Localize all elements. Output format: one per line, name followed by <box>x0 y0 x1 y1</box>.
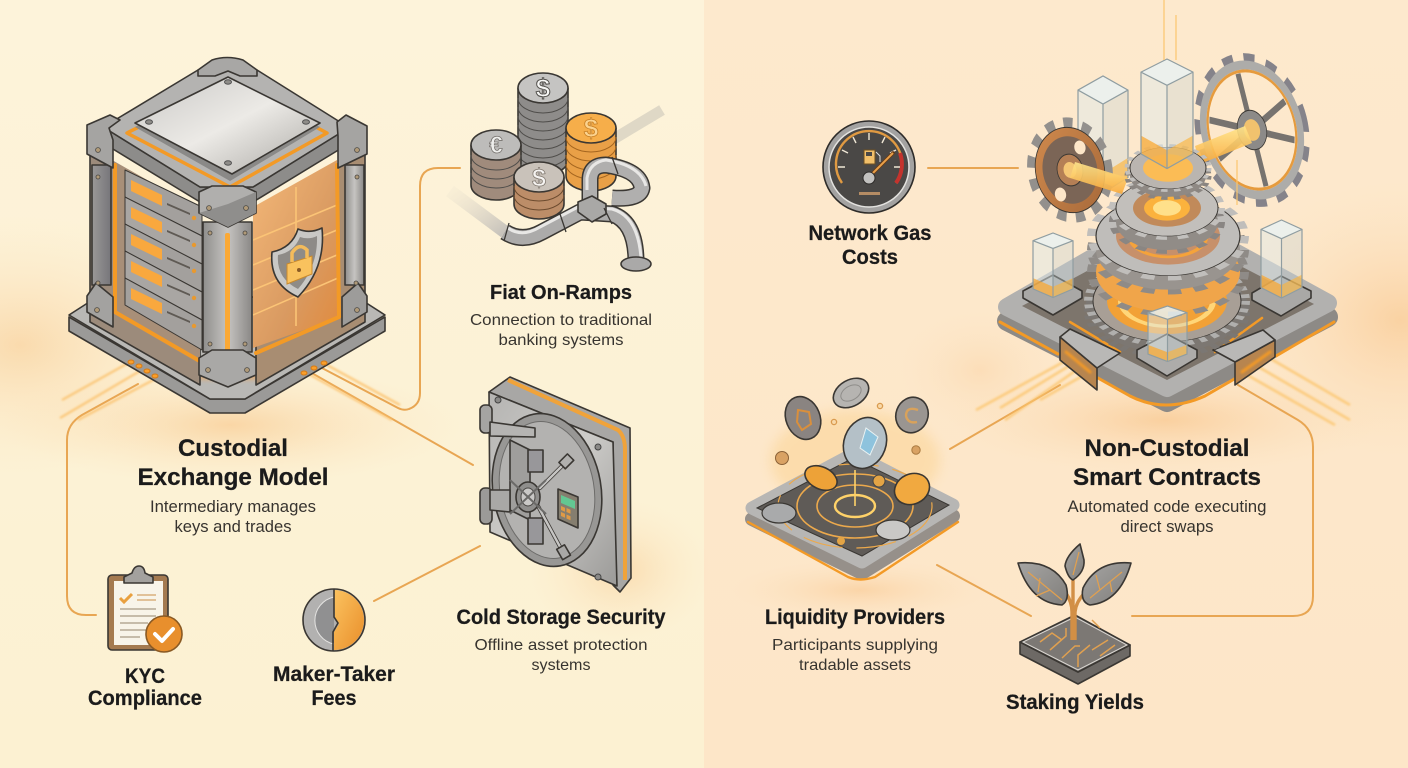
right gear <box>1184 48 1320 212</box>
connector: contract to staking <box>1132 385 1313 616</box>
light trails <box>60 362 400 420</box>
text: custodial description <box>150 498 316 536</box>
text: cold storage description: systems <box>532 657 590 674</box>
title: Custodial Exchange Model: Custodial <box>178 435 288 462</box>
far pipe segment <box>612 110 662 140</box>
shield with padlock <box>272 228 322 297</box>
light column <box>1164 0 1237 205</box>
left beam <box>1070 162 1128 194</box>
tall silver stack <box>518 73 568 175</box>
background: right panel <box>704 0 1408 768</box>
stem <box>1048 577 1108 640</box>
corner brackets and posts <box>87 58 367 387</box>
connector: pool to staking <box>937 565 1031 616</box>
chip <box>1020 642 1130 684</box>
icon: network gas gauge <box>823 121 915 213</box>
icon: maker-taker coin <box>303 589 365 651</box>
label: KYC Compliance: KYC <box>125 665 165 688</box>
right pedestal crystal <box>1252 220 1311 316</box>
text: non-custodial description: Automated code executing <box>1068 498 1266 516</box>
label: Maker-Taker Fees <box>273 663 395 710</box>
vault door disc <box>480 405 614 575</box>
text: custodial description: keys and trades <box>174 518 292 536</box>
title: Non-Custodial Smart Contracts: Smart Contracts <box>1073 464 1261 491</box>
connector: contract to liquidity pool <box>950 385 1060 449</box>
bottom gear <box>1091 270 1243 354</box>
background glows <box>0 180 1408 640</box>
label: Maker-Taker Fees: Maker-Taker <box>273 663 395 686</box>
icon: KYC clipboard <box>108 566 182 652</box>
connector: exchange to KYC <box>67 384 138 615</box>
euro stack <box>471 130 521 200</box>
locking bars <box>538 460 568 556</box>
platform <box>1007 229 1328 402</box>
connector: gas to smart contract <box>928 167 1018 169</box>
hinges <box>510 440 530 520</box>
text: fiat description: Connection to traditional <box>470 312 652 329</box>
icon: liquidity pool <box>748 372 958 580</box>
gold stack <box>566 113 616 191</box>
leaves <box>1018 563 1067 605</box>
icon: coins and pipeline <box>450 73 662 271</box>
left gear <box>1023 116 1117 224</box>
keypad <box>558 489 578 528</box>
icon: custodial exchange server cube <box>60 58 400 420</box>
title: Non-Custodial Smart Contracts <box>1073 435 1261 491</box>
base port lights <box>128 360 327 378</box>
top gear <box>1130 155 1206 197</box>
coins <box>762 372 935 545</box>
wheel <box>516 482 540 512</box>
connector: exchange to fiat on-ramps <box>322 168 460 410</box>
text: liquidity description <box>772 637 938 674</box>
brushed top plate <box>135 82 320 181</box>
pipes <box>450 160 646 262</box>
text: non-custodial description: direct swaps <box>1120 518 1214 536</box>
text: fiat description: banking systems <box>498 332 624 349</box>
upper gear <box>1116 194 1218 250</box>
front dollar stack: $ <box>532 164 546 192</box>
base plate <box>69 317 385 413</box>
icon: non-custodial smart contract gears <box>976 0 1350 425</box>
label: Staking Yields: Staking Yields <box>1006 691 1144 714</box>
label: KYC Compliance <box>88 665 202 710</box>
connector: maker-taker to vault <box>374 546 480 601</box>
pool tray <box>752 465 953 573</box>
connector: exchange to cold storage <box>310 372 473 465</box>
fuel pump glyph <box>864 150 880 164</box>
server units <box>125 170 202 350</box>
text: fiat description <box>470 312 652 349</box>
pool swirl rings <box>778 464 932 548</box>
icon: vault door <box>480 377 631 592</box>
label: KYC Compliance: Compliance <box>88 687 202 710</box>
light trails <box>976 356 1350 425</box>
middle large gear <box>1096 232 1240 312</box>
label: Network Gas Costs: Network Gas <box>808 222 932 245</box>
back crystal <box>1078 76 1128 193</box>
upper elbow <box>590 165 642 200</box>
label: Fiat On-Ramps: Fiat On-Ramps <box>490 282 632 304</box>
icon: staking plant on chip <box>1018 544 1131 684</box>
top frame <box>108 130 345 202</box>
centre crystal <box>1141 59 1193 168</box>
right face glass <box>256 150 365 385</box>
label: Liquidity Providers: Liquidity Providers <box>765 606 945 629</box>
text: custodial description: Intermediary manages <box>150 498 316 516</box>
title: Non-Custodial Smart Contracts: Non-Custodial <box>1084 435 1250 462</box>
label: Cold Storage Security: Cold Storage Security <box>456 606 666 629</box>
title: Custodial Exchange Model <box>138 435 328 491</box>
text: cold storage description <box>474 637 648 674</box>
text: liquidity description: Participants supplying <box>772 637 938 654</box>
text: non-custodial description <box>1068 498 1266 536</box>
lower pipe run <box>505 212 636 262</box>
title: Custodial Exchange Model: Exchange Model <box>138 464 328 491</box>
gold stack: $ <box>584 113 599 143</box>
label: Maker-Taker Fees: Fees <box>312 687 356 710</box>
text: liquidity description: tradable assets <box>799 657 911 674</box>
front dollar stack <box>514 162 564 219</box>
background: left panel <box>0 0 706 768</box>
label: Network Gas Costs: Costs <box>842 246 898 269</box>
left face <box>90 150 200 385</box>
tall silver stack: $ <box>536 73 551 103</box>
connector housings <box>1060 329 1275 390</box>
label: Network Gas Costs <box>808 222 932 269</box>
text: cold storage description: Offline asset protection <box>474 637 648 654</box>
left pedestal crystal <box>1023 233 1082 315</box>
right beam <box>1195 126 1252 164</box>
euro stack: € <box>489 132 503 159</box>
front pedestal crystal <box>1137 306 1197 376</box>
